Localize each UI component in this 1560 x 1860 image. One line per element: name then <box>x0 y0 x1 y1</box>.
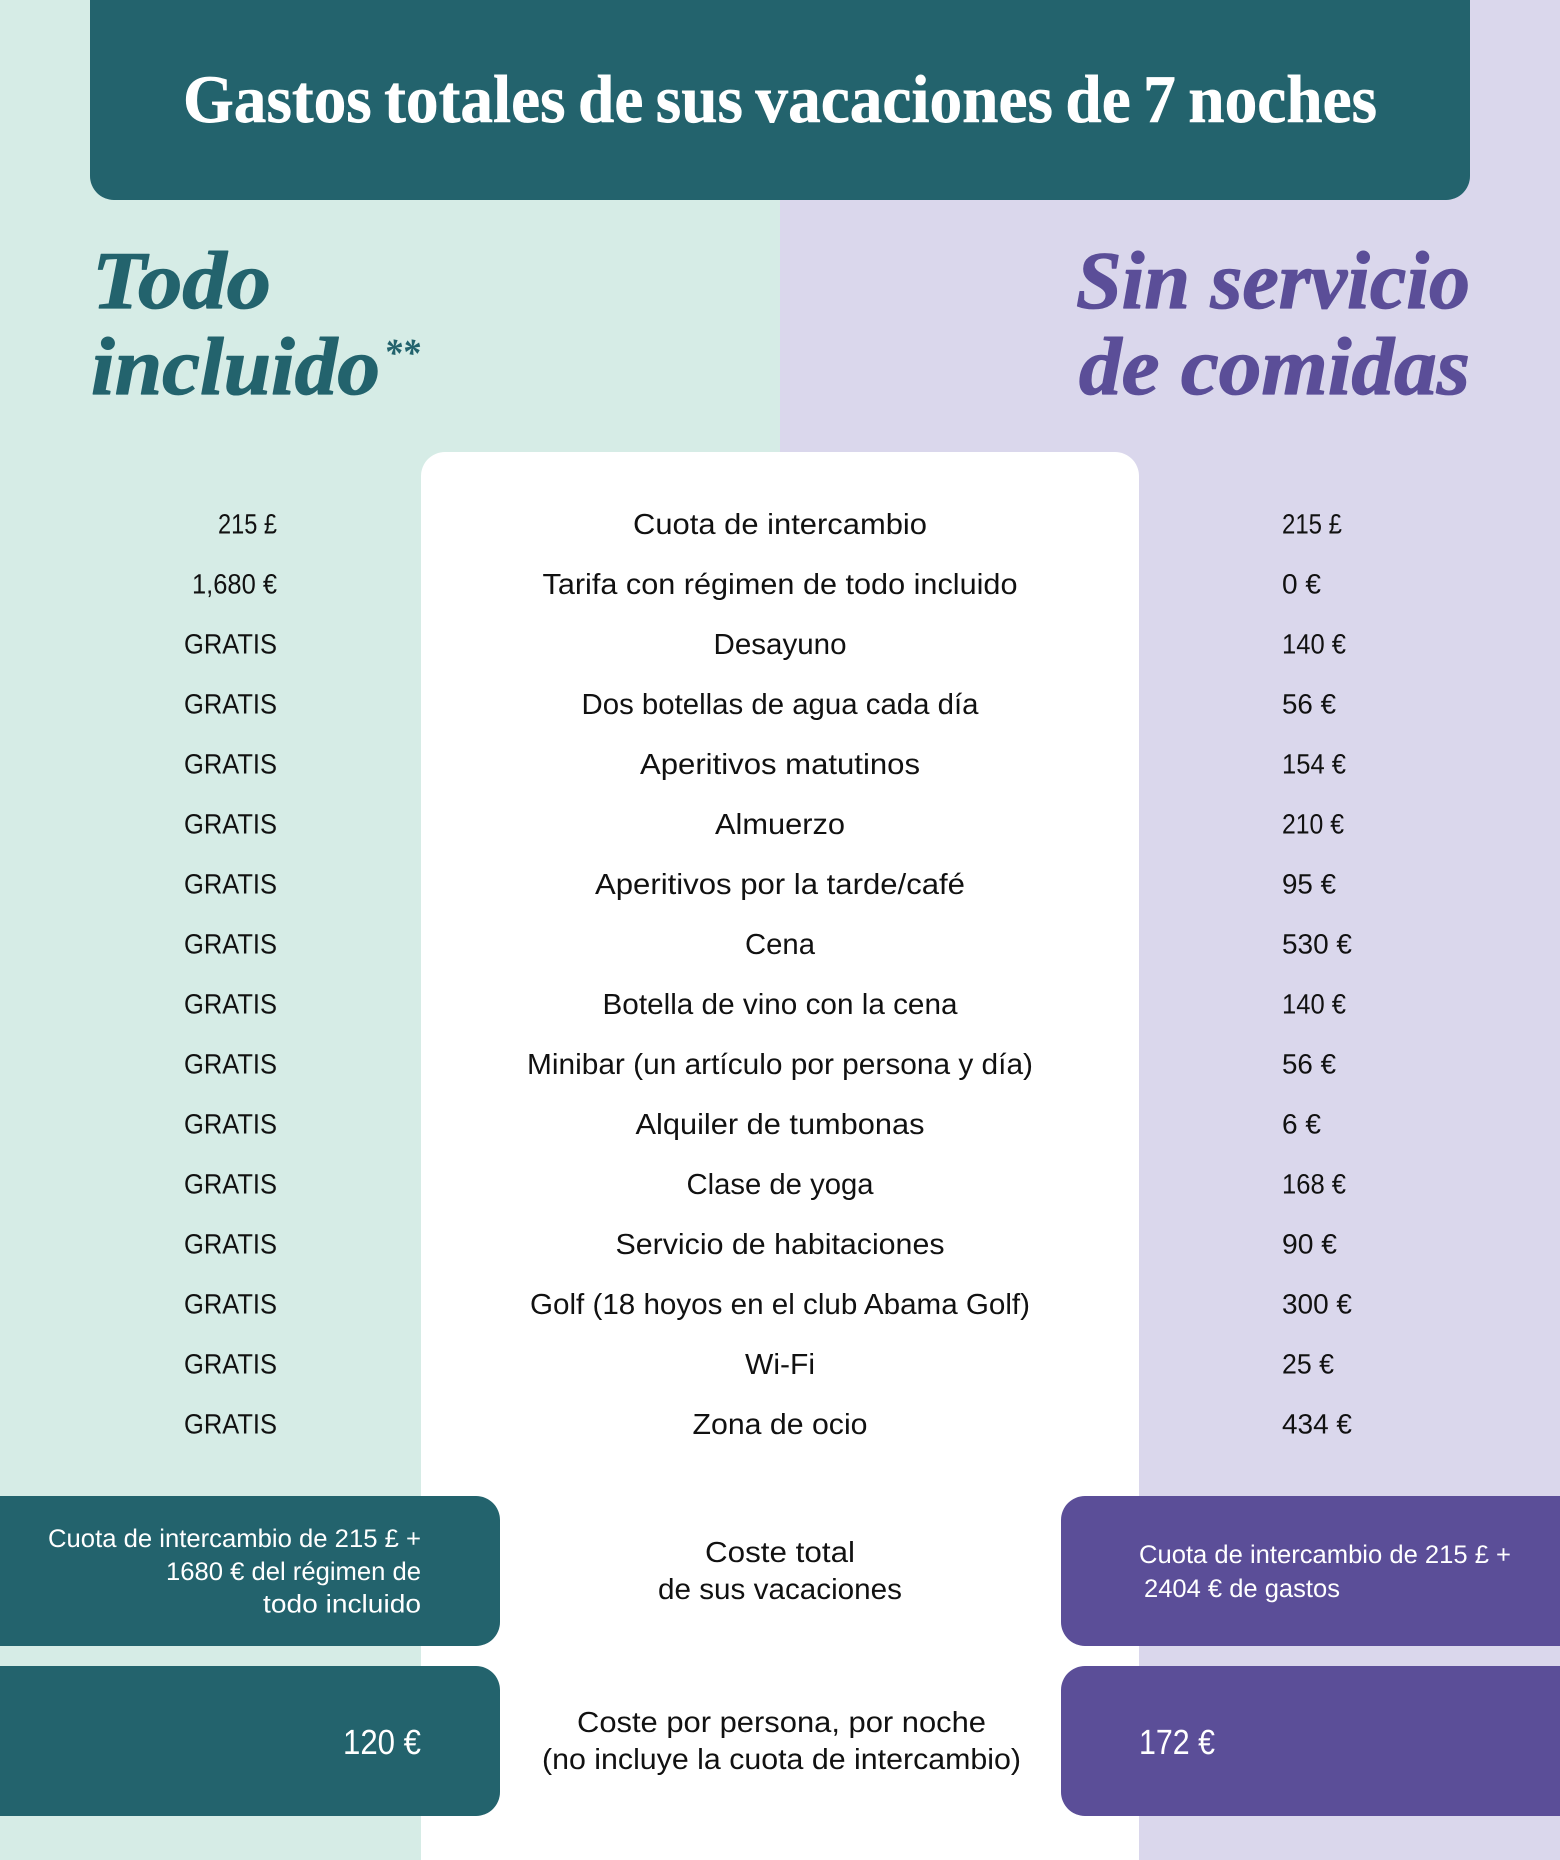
panel: per person cost todo incluido <box>0 1666 500 1816</box>
column: todo incluido prices: GRATIS <box>184 1108 277 1140</box>
column: todo incluido prices: GRATIS <box>184 808 277 840</box>
column: sin servicio de comidas prices: 25 € <box>1282 1348 1334 1380</box>
column: todo incluido prices <box>184 508 277 1440</box>
label: coste total: de sus vacaciones <box>658 1574 902 1606</box>
column: sin servicio de comidas prices: 210 € <box>1282 808 1344 840</box>
label: coste total <box>658 1537 902 1606</box>
panel: title banner <box>90 0 1470 200</box>
column: todo incluido prices: 1,680 € <box>192 568 277 600</box>
column: expense item names: Aperitivos por la tarde/café <box>595 869 965 901</box>
panel: central white column <box>421 452 1139 1860</box>
column: expense item names: Alquiler de tumbonas <box>636 1109 924 1141</box>
column: todo incluido prices: GRATIS <box>184 868 277 900</box>
column: sin servicio de comidas prices: 434 € <box>1282 1408 1352 1440</box>
column: sin servicio de comidas prices: 530 € <box>1282 928 1352 960</box>
panel: total cost sin servicio de comidas: 2404 € de gastos <box>1144 1575 1340 1603</box>
label: coste por persona: Coste por persona, por noche <box>577 1707 986 1739</box>
heading: Todo incluido: Todo <box>92 235 271 326</box>
label: coste total: Coste total <box>705 1537 855 1569</box>
panel: total cost sin servicio de comidas <box>1061 1496 1560 1646</box>
column: expense item names: Minibar (un artículo por persona y día) <box>527 1049 1033 1081</box>
heading: Todo incluido: incluido <box>91 321 380 412</box>
column: sin servicio de comidas prices: 90 € <box>1282 1228 1337 1260</box>
panel: per person cost todo incluido: 120 € <box>343 1723 421 1762</box>
column: todo incluido prices: GRATIS <box>184 1408 277 1440</box>
column: sin servicio de comidas prices: 215 £ <box>1282 508 1342 540</box>
column: expense item names: Aperitivos matutinos <box>640 749 920 781</box>
column: expense item names: Servicio de habitaciones <box>616 1229 944 1261</box>
column: sin servicio de comidas prices: 6 € <box>1282 1108 1321 1140</box>
column: expense item names: Cena <box>745 929 816 961</box>
column: sin servicio de comidas prices: 95 € <box>1282 868 1336 900</box>
column: todo incluido prices: GRATIS <box>184 1348 277 1380</box>
heading: Sin servicio de comidas: de comidas <box>1079 321 1470 412</box>
panel: per person cost sin servicio de comidas: 172 € <box>1139 1723 1215 1762</box>
heading: Todo incluido: ** <box>384 330 421 375</box>
column: todo incluido prices: 215 £ <box>218 508 277 540</box>
column: todo incluido prices: GRATIS <box>184 1168 277 1200</box>
column: sin servicio de comidas prices: 154 € <box>1282 748 1346 780</box>
column: todo incluido prices: GRATIS <box>184 688 277 720</box>
panel: total cost todo incluido: Cuota de intercambio de 215 £ + <box>48 1525 421 1553</box>
column: sin servicio de comidas prices: 300 € <box>1282 1288 1352 1320</box>
column: expense item names: Tarifa con régimen de todo incluido <box>542 569 1018 601</box>
column: todo incluido prices: GRATIS <box>184 1288 277 1320</box>
column: expense item names: Zona de ocio <box>692 1409 868 1441</box>
column: sin servicio de comidas prices: 56 € <box>1282 1048 1336 1080</box>
column: todo incluido prices: GRATIS <box>184 928 277 960</box>
column: expense item names <box>527 509 1033 1441</box>
column: todo incluido prices: GRATIS <box>184 748 277 780</box>
column: todo incluido prices: GRATIS <box>184 628 277 660</box>
column: sin servicio de comidas prices: 56 € <box>1282 688 1336 720</box>
column: todo incluido prices: GRATIS <box>184 988 277 1020</box>
column: sin servicio de comidas prices: 140 € <box>1282 628 1346 660</box>
column: todo incluido prices: GRATIS <box>184 1228 277 1260</box>
heading: Todo incluido <box>91 235 421 412</box>
column: sin servicio de comidas prices: 0 € <box>1282 568 1321 600</box>
column: expense item names: Cuota de intercambio <box>633 509 927 541</box>
column: expense item names: Wi-Fi <box>745 1349 815 1381</box>
panel: total cost sin servicio de comidas: Cuota de intercambio de 215 £ + <box>1139 1541 1511 1569</box>
column: expense item names: Desayuno <box>714 629 846 661</box>
panel: per person cost sin servicio de comidas <box>1061 1666 1560 1816</box>
panel: total cost todo incluido <box>0 1496 500 1646</box>
heading: Sin servicio de comidas <box>1076 235 1470 412</box>
column: sin servicio de comidas prices: 168 € <box>1282 1168 1346 1200</box>
title: Gastos totales de sus vacaciones de 7 noches <box>183 61 1377 137</box>
panel: total cost todo incluido: todo incluido <box>263 1590 421 1618</box>
column: expense item names: Dos botellas de agua cada día <box>582 689 979 721</box>
panel: total cost todo incluido: 1680 € del régimen de <box>166 1558 421 1586</box>
column: sin servicio de comidas prices: 140 € <box>1282 988 1346 1020</box>
heading: Sin servicio de comidas: Sin servicio <box>1076 235 1470 326</box>
column: sin servicio de comidas prices <box>1282 508 1352 1440</box>
column: expense item names: Clase de yoga <box>686 1169 874 1201</box>
label: coste por persona <box>542 1707 1021 1776</box>
column: expense item names: Golf (18 hoyos en el club Abama Golf) <box>530 1289 1030 1321</box>
label: coste por persona: (no incluye la cuota de intercambio) <box>542 1744 1021 1776</box>
column: todo incluido prices: GRATIS <box>184 1048 277 1080</box>
column: expense item names: Botella de vino con la cena <box>602 989 958 1021</box>
column: expense item names: Almuerzo <box>715 809 845 841</box>
